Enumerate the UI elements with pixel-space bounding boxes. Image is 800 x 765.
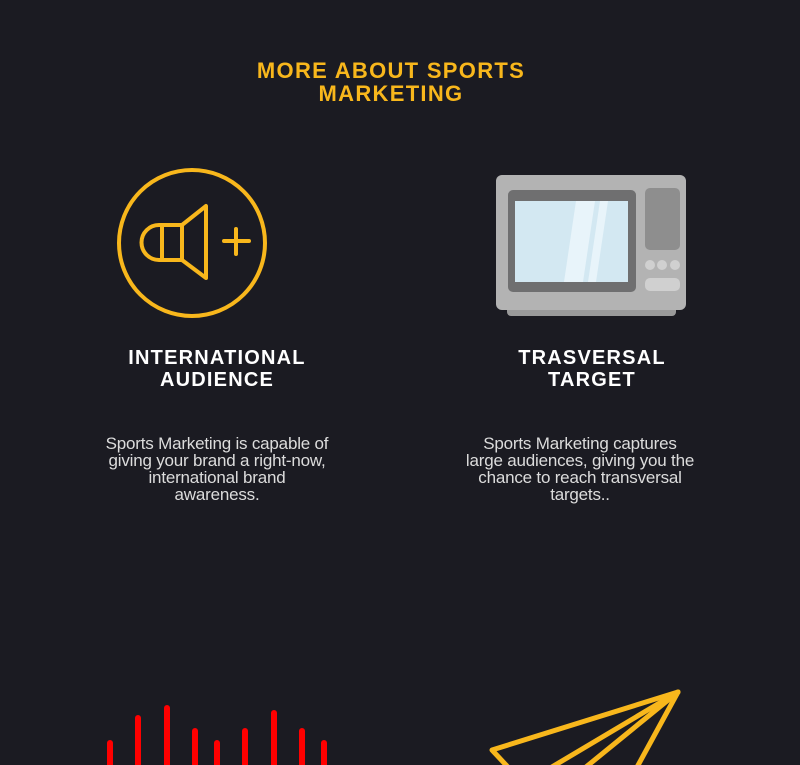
heading: trasversal target — [518, 347, 666, 391]
title: MARKETING — [319, 81, 463, 106]
text: international audience: Sports Marketing is capable of — [106, 434, 328, 453]
text: international audience: awareness. — [175, 485, 259, 504]
text: trasversal target: large audiences, giving you the — [466, 451, 694, 470]
heading: trasversal target: TARGET — [548, 369, 636, 391]
text: trasversal target: Sports Marketing captures — [483, 434, 677, 453]
heading: international audience — [128, 347, 306, 391]
heading: trasversal target: TRASVERSAL — [518, 347, 666, 369]
text: trasversal target: chance to reach transversal — [478, 468, 682, 487]
heading: international audience: AUDIENCE — [160, 369, 274, 391]
text: international audience: giving your brand a right-now, — [108, 451, 326, 470]
text: trasversal target: targets.. — [550, 485, 610, 504]
text: trasversal target — [466, 434, 694, 504]
heading: international audience: INTERNATIONAL — [128, 347, 306, 369]
text: international audience: international brand — [148, 468, 286, 487]
text: international audience — [106, 434, 328, 504]
title: MORE ABOUT SPORTS — [257, 58, 525, 83]
title — [257, 58, 525, 106]
